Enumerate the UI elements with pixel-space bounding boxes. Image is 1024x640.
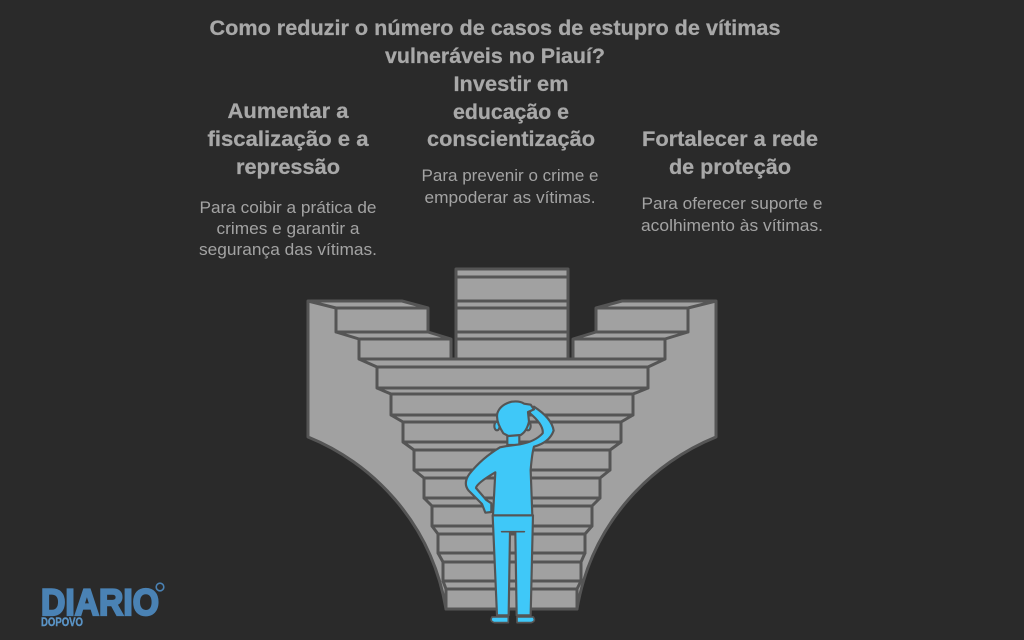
text: aumentar a fiscalização: segurança das vítimas. xyxy=(199,240,377,259)
heading: aumentar a fiscalização: fiscalização e a xyxy=(208,127,370,151)
right shoe xyxy=(517,617,534,623)
head xyxy=(497,401,534,436)
logo: Diario do Povo: DOPOVO xyxy=(41,617,83,629)
left ear xyxy=(494,422,500,430)
title: vulneráveis no Piauí? xyxy=(385,44,605,68)
staircase illustration xyxy=(308,269,716,609)
figure: person scratching head xyxy=(466,401,554,623)
shoes xyxy=(491,617,508,623)
logo: Diario do Povo: DIARIO xyxy=(41,582,159,623)
heading: investir em educação: conscientização xyxy=(427,127,595,151)
central tower xyxy=(456,269,568,359)
steps xyxy=(308,301,716,609)
torso and arms xyxy=(466,407,554,515)
heading: aumentar a fiscalização xyxy=(208,99,370,179)
title xyxy=(210,16,781,68)
panel: investir em educação xyxy=(422,72,598,207)
text: fortalecer a rede: acolhimento às vítimas. xyxy=(641,216,823,235)
text: aumentar a fiscalização: Para coibir a prática de xyxy=(200,198,376,217)
heading: aumentar a fiscalização: repressão xyxy=(236,155,340,179)
title: Como reduzir o número de casos de estupro de vítimas xyxy=(210,16,781,40)
heading: investir em educação: educação e xyxy=(453,100,569,124)
panel: aumentar a fiscalização xyxy=(199,99,377,259)
crotch line xyxy=(502,529,524,534)
text: aumentar a fiscalização xyxy=(199,198,377,259)
heading: fortalecer a rede: de proteção xyxy=(669,155,791,179)
right ear xyxy=(525,422,531,430)
heading: aumentar a fiscalização: Aumentar a xyxy=(228,99,350,123)
heading: investir em educação: Investir em xyxy=(454,72,568,96)
heading: fortalecer a rede: Fortalecer a rede xyxy=(642,127,818,151)
text: investir em educação: Para prevenir o crime e xyxy=(422,166,598,185)
text: aumentar a fiscalização: crimes e garantir a xyxy=(216,219,360,238)
text: investir em educação: empoderar as vítimas. xyxy=(424,188,596,207)
text: investir em educação xyxy=(422,166,598,207)
heading: fortalecer a rede xyxy=(642,127,818,179)
text: fortalecer a rede: Para oferecer suporte e xyxy=(642,194,822,213)
legs xyxy=(493,515,533,615)
heading: investir em educação xyxy=(427,72,595,151)
wings and base silhouette xyxy=(308,301,716,609)
text: fortalecer a rede xyxy=(641,194,823,235)
neck xyxy=(507,433,519,445)
panel: fortalecer a rede xyxy=(641,127,823,235)
